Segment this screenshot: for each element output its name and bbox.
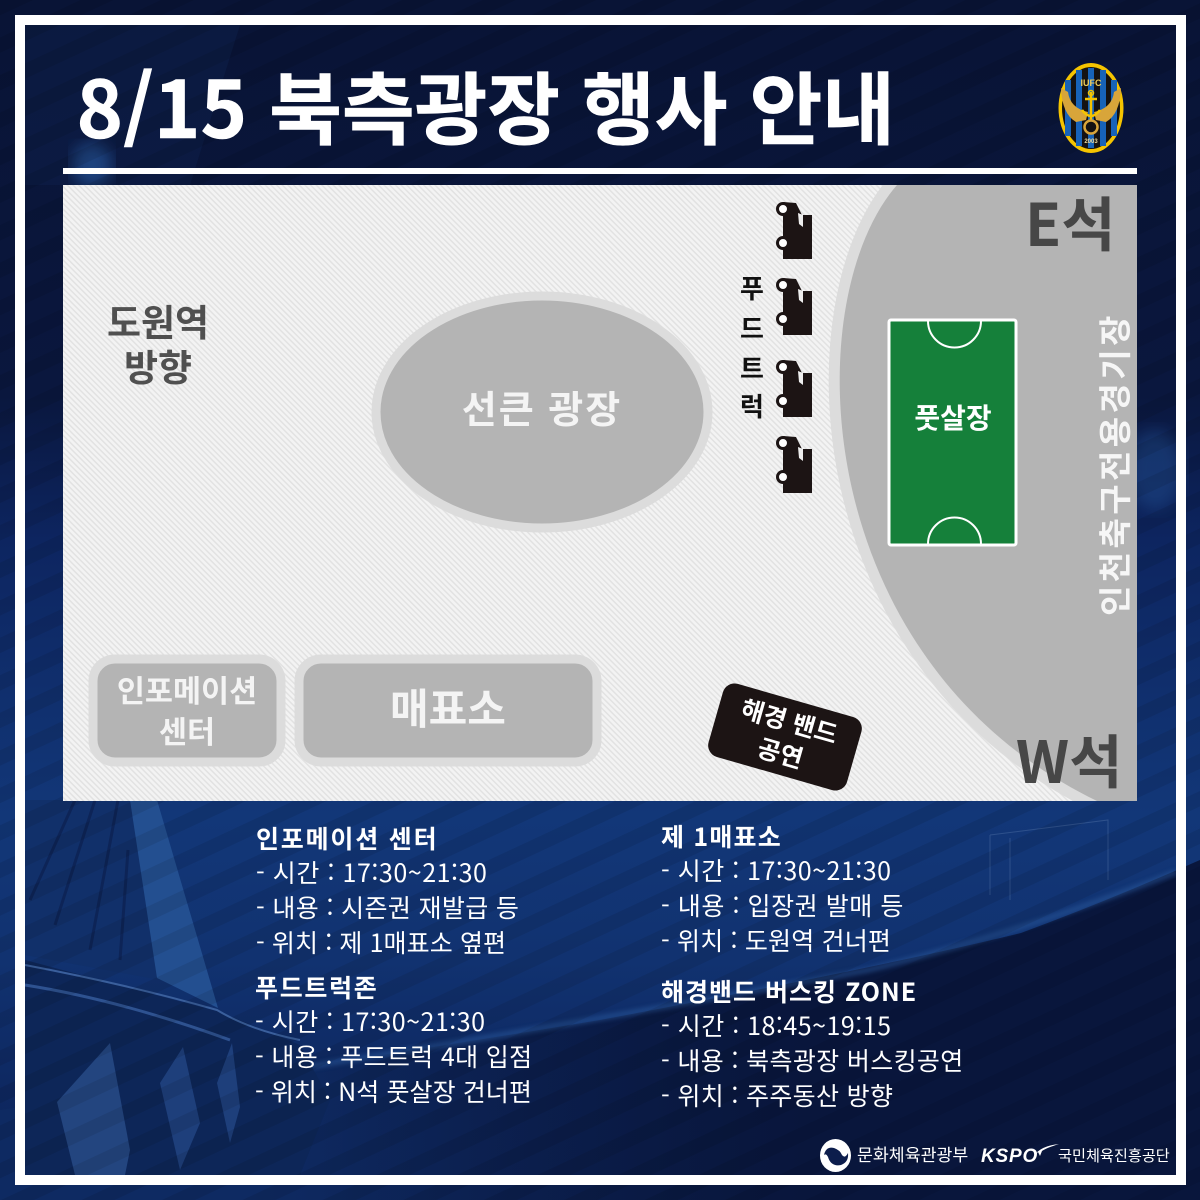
icon: ministry emblem <box>820 1139 851 1172</box>
ticket office box <box>299 659 597 762</box>
panel: site map <box>63 185 1137 801</box>
text block: food truck zone: - 내용 : 푸드트럭 4대 입점 <box>255 1038 533 1074</box>
text block: band busking zone: 해경밴드 버스킹 ZONE <box>661 973 917 1009</box>
text block: band busking zone: - 시간 : 18:45~19:15 <box>661 1007 892 1043</box>
heading: W stand: W석 <box>1016 716 1122 800</box>
icon: club emblem: 2003 <box>1084 139 1098 145</box>
text block: information center: - 내용 : 시즌권 재발급 등 <box>256 889 519 925</box>
text block: information center: 인포메이션 센터 <box>256 820 438 856</box>
label: food truck: 트 <box>740 349 764 386</box>
label: Dowon station direction <box>107 293 209 392</box>
seats, bottom right <box>0 860 1200 1200</box>
label: KSPO logo: KSPO <box>981 1146 1038 1167</box>
footer logos <box>820 1139 1170 1172</box>
text block: ticket office 1: 제 1매표소 <box>661 818 782 854</box>
icon: KSPO swoosh <box>1036 1144 1059 1156</box>
label: KSPO name: 국민체육진흥공단 <box>1058 1144 1170 1166</box>
label: stadium name: 인천축구전용경기장 <box>1089 312 1137 616</box>
text block: ticket office 1: - 내용 : 입장권 발매 등 <box>661 887 904 923</box>
text block: ticket office 1 <box>661 818 904 958</box>
label: Dowon station direction: 방향 <box>124 338 192 392</box>
ticket office box: 매표소 <box>390 676 506 737</box>
stadium <box>840 178 1137 801</box>
text block: information center: - 시간 : 17:30~21:30 <box>256 854 487 890</box>
label: ministry name: 문화체육관광부 <box>857 1141 968 1166</box>
goal outline <box>990 820 1108 900</box>
text block: ticket office 1: - 위치 : 도원역 건너편 <box>661 922 891 958</box>
information center box: 인포메이션 <box>117 667 257 711</box>
text block: food truck zone: - 위치 : N석 풋살장 건너편 <box>255 1073 532 1109</box>
text block: band busking zone: - 위치 : 주주동산 방향 <box>661 1077 893 1113</box>
text block: food truck zone: - 시간 : 17:30~21:30 <box>255 1003 486 1039</box>
band performance badge: 공연 <box>754 729 808 776</box>
plaza oval: 선큰 광장 <box>462 379 622 434</box>
band performance badge: 해경 밴드 <box>737 690 842 752</box>
label: food truck: 럭 <box>740 387 764 424</box>
label: Dowon station direction: 도원역 <box>107 293 209 347</box>
plaza oval <box>376 296 708 528</box>
text block: ticket office 1: - 시간 : 17:30~21:30 <box>661 852 892 888</box>
information center box: 센터 <box>159 708 215 752</box>
right-side blue tint <box>1127 430 1183 510</box>
header rule <box>63 168 1137 174</box>
label: food truck: 푸 <box>740 269 764 306</box>
futsal court <box>889 320 1016 545</box>
icon: club emblem: IUFC <box>1080 78 1102 88</box>
band performance badge <box>705 681 865 793</box>
lower-left structure <box>25 960 330 1175</box>
text block: information center: - 위치 : 제 1매표소 옆편 <box>256 924 506 960</box>
text block: band busking zone: - 내용 : 북측광장 버스킹공연 <box>661 1042 964 1078</box>
futsal court: 풋살장 <box>914 397 992 437</box>
light wedge <box>130 800 218 1008</box>
title: 8/15 북측광장 행사 안내 <box>76 46 895 161</box>
text block: food truck zone: 푸드트럭존 <box>255 969 379 1005</box>
text block: information center <box>256 820 519 960</box>
text block: food truck zone <box>255 969 533 1109</box>
left stands <box>25 800 160 980</box>
label: food truck <box>740 269 764 424</box>
top-left photo tint <box>25 25 240 185</box>
icon: club emblem <box>1058 63 1124 153</box>
information center box <box>93 659 281 762</box>
text block: band busking zone <box>661 973 964 1113</box>
label: food truck: 드 <box>740 309 764 346</box>
icon: food trucks <box>778 202 812 493</box>
